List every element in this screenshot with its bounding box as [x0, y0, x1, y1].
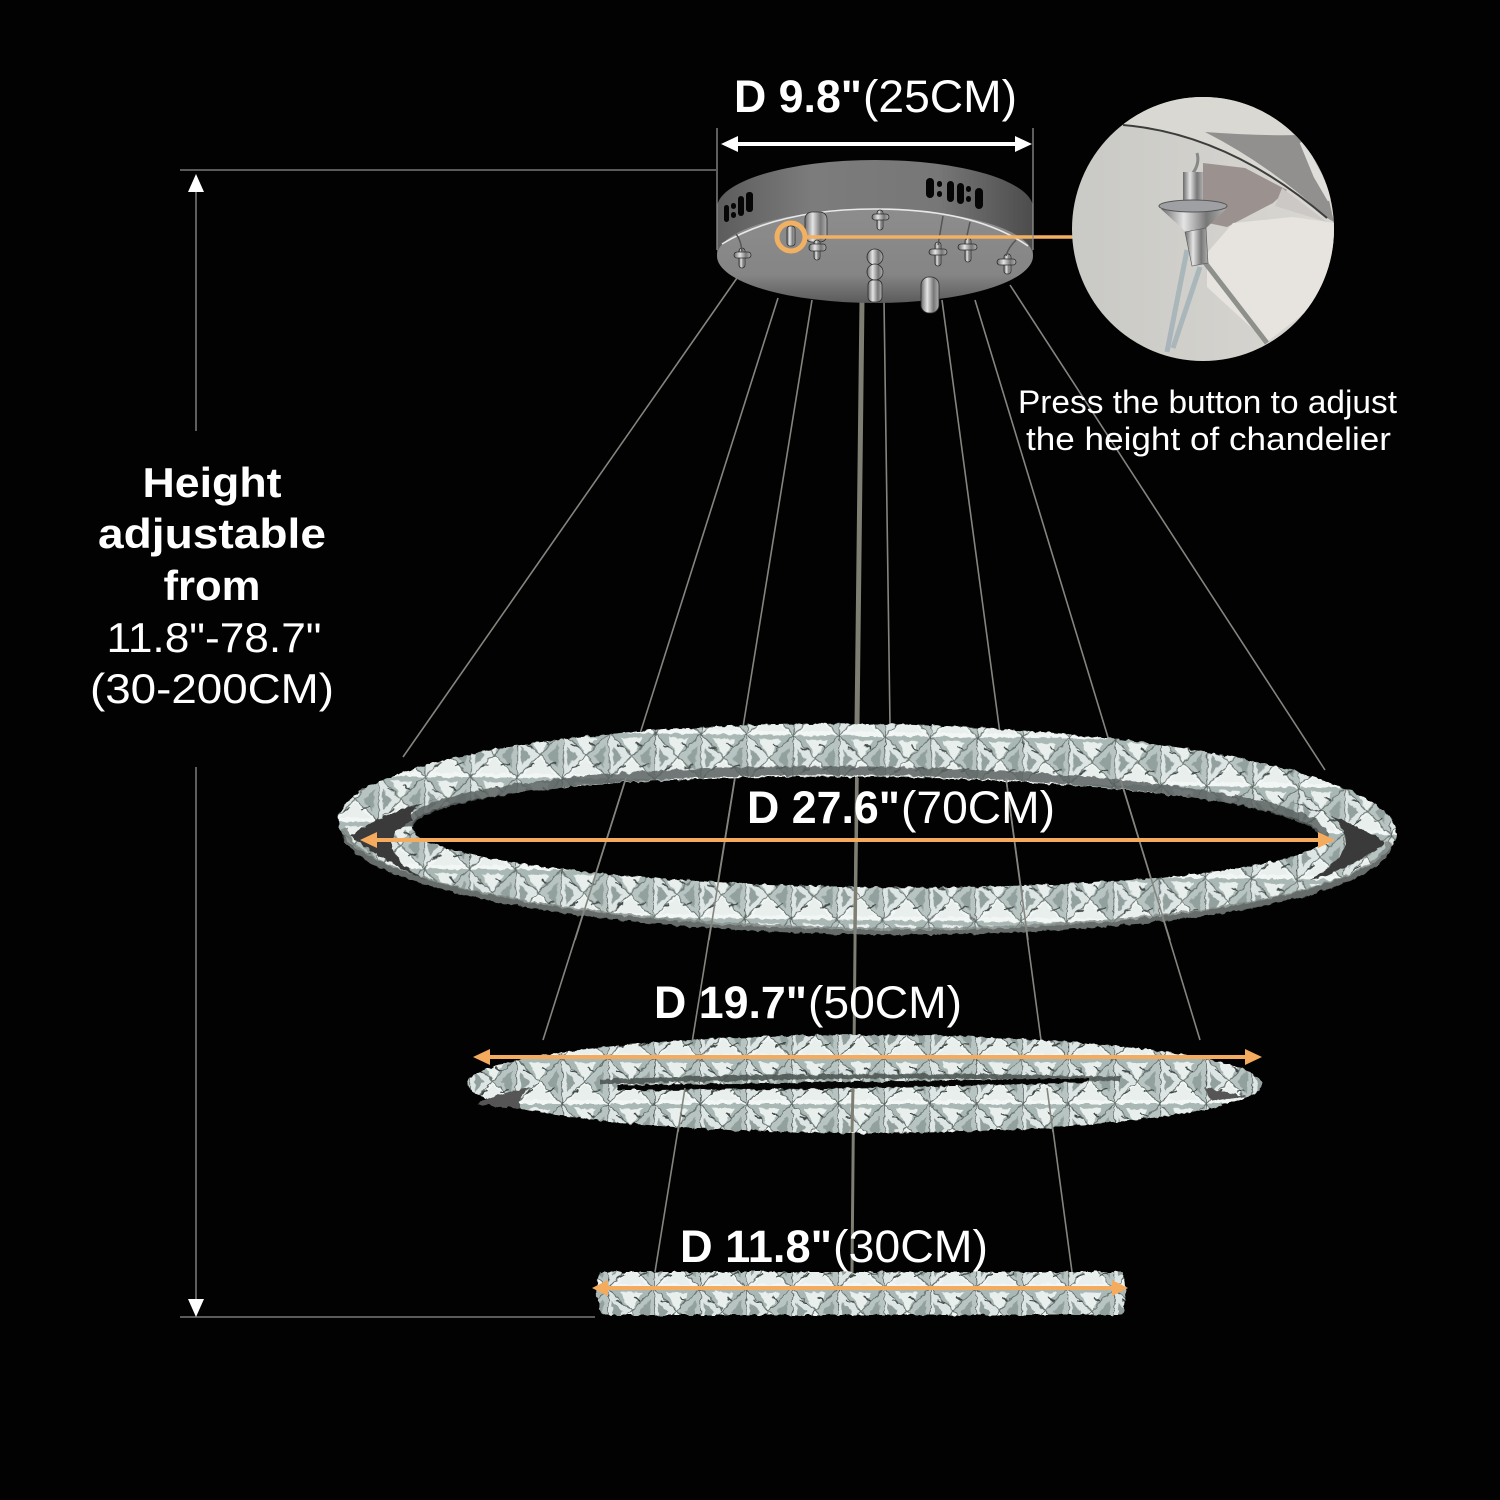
orange arrow [360, 832, 1335, 848]
dimension: small ring [592, 1221, 1128, 1296]
large ring [337, 718, 1397, 937]
white double arrow [721, 136, 1032, 152]
inset caption [1018, 384, 1397, 457]
middle ring right crescent [1205, 1088, 1247, 1101]
canopy size label: D 9.8" [734, 71, 862, 122]
canopy screws and fittings [734, 210, 1016, 313]
large ring back band underside [409, 765, 1326, 838]
large ring left crescent [350, 797, 444, 880]
inset upper fabric [1124, 97, 1330, 194]
small ring [597, 1272, 1126, 1315]
height label [90, 459, 334, 712]
small ring label: D 11.8" [680, 1221, 832, 1272]
inset mesh [1203, 163, 1287, 227]
height label: from [164, 562, 260, 609]
dimension: middle ring [473, 977, 1262, 1065]
button callout: orange ring and leader [777, 223, 1073, 251]
inset curved edge [1123, 125, 1327, 218]
large ring label: (70CM) [901, 782, 1055, 833]
orange arrow [592, 1280, 1128, 1296]
height label: 11.8"-78.7" [106, 614, 322, 661]
canopy [717, 160, 1033, 313]
dimension: canopy diameter [717, 71, 1033, 250]
large ring tilted band [337, 718, 1397, 937]
canopy underside [717, 209, 1033, 303]
inset caption: Press the button to adjust [1018, 384, 1397, 420]
height label: (30-200CM) [90, 665, 334, 712]
middle ring left crescent [477, 1088, 532, 1108]
height label: adjustable [98, 510, 326, 557]
orange arrow [473, 1049, 1262, 1065]
wires in front of ring bands [575, 778, 1170, 1132]
middle ring label: D 19.7" [654, 977, 807, 1028]
suspension wires [403, 278, 1325, 1272]
inset cable [1203, 260, 1267, 343]
canopy size label: (25CM) [863, 71, 1017, 122]
height label: Height [142, 459, 282, 506]
dimension: overall height [180, 170, 716, 1317]
small ring label: (30CM) [833, 1221, 988, 1272]
large ring front band outer edge [344, 829, 1389, 937]
middle ring label: (50CM) [808, 977, 962, 1028]
middle ring gap [618, 1078, 1090, 1090]
middle ring [468, 1035, 1262, 1133]
height arrowheads [188, 174, 204, 1317]
canopy side wall [717, 160, 1033, 256]
large ring label: D 27.6" [747, 782, 900, 833]
canopy rim highlight [722, 209, 1028, 246]
dimension: large ring [360, 782, 1335, 848]
inset white fabric [1207, 217, 1334, 342]
large ring right crescent [1290, 803, 1385, 880]
middle ring back band underside [600, 1076, 1120, 1082]
inset: button close-up photo [1072, 97, 1334, 361]
inset shadow of cable [1167, 250, 1200, 352]
canopy vent slots [724, 178, 983, 222]
short cables to the rim [736, 216, 1016, 256]
inset button device [1183, 172, 1203, 200]
inset caption: the height of chandelier [1026, 421, 1391, 457]
